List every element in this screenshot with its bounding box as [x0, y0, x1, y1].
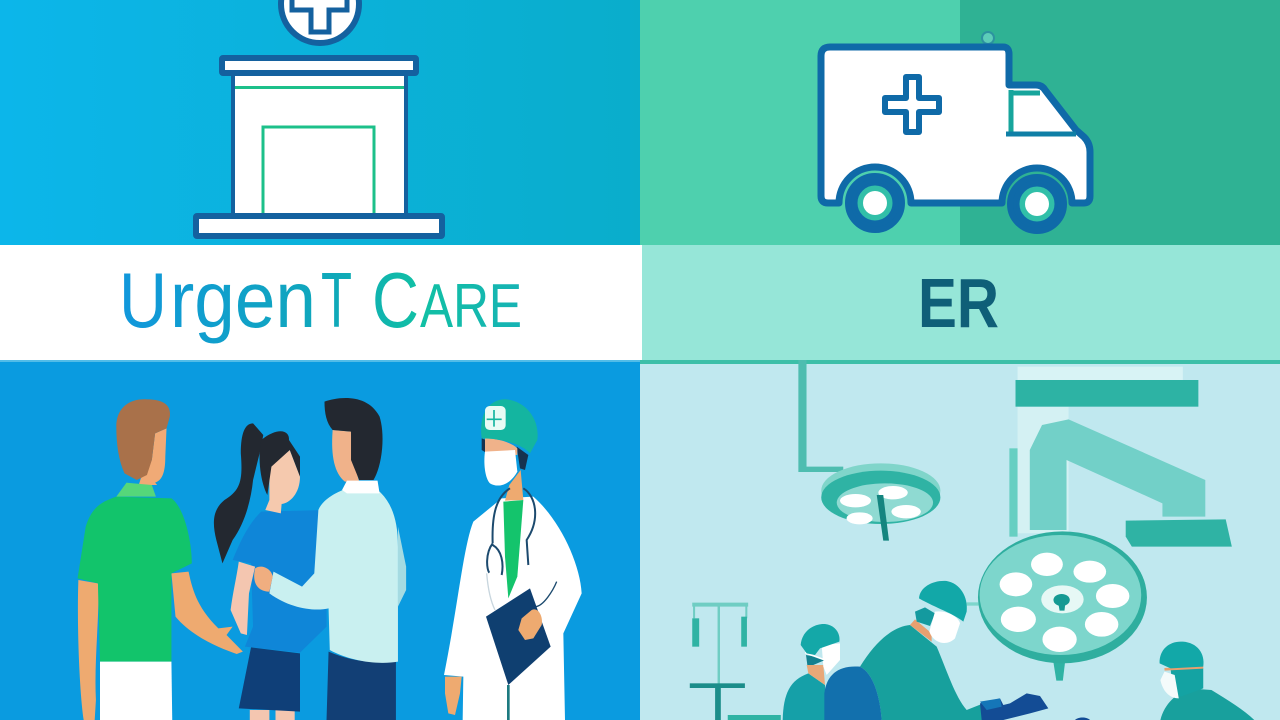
panel: patients and doctor: [0, 360, 640, 720]
illustration: small surgical lamp: [798, 360, 940, 541]
heading: Urgent Care: T: [321, 256, 352, 344]
heading: Urgent Care: ARE: [420, 272, 522, 341]
figure: surgeon on left: [783, 624, 840, 720]
figure: woman with ponytail: [214, 423, 327, 720]
icon: front wheel: [848, 176, 902, 230]
group: surgeons at the table: [783, 581, 1090, 720]
panel: ambulance: [640, 0, 1280, 245]
heading band: ER: [642, 245, 1280, 360]
icon: rear wheel: [1010, 177, 1064, 231]
illustration: ceiling arm: [1009, 367, 1232, 547]
icon: cross on ambulance: [885, 77, 939, 132]
heading: Urgent Care: C: [372, 256, 419, 344]
heading: Urgent Care: [119, 255, 522, 344]
group: operating room equipment: [690, 360, 1254, 720]
heading band: urgent care: [0, 245, 641, 360]
group: patients: [78, 398, 406, 720]
icon: cap badge: [485, 406, 506, 430]
icon: clipboard: [486, 588, 551, 685]
panel: urgent care building: [0, 0, 640, 245]
figure: man in green shirt: [78, 399, 243, 720]
figure: man in pale shirt: [254, 398, 406, 720]
illustration: IV stand: [690, 603, 781, 720]
illustration: large surgical lamp: [978, 531, 1147, 681]
figure: surgeon on right: [1160, 642, 1254, 720]
icon: urgent care clinic building: [196, 0, 442, 236]
icon: medical cross sign: [281, 0, 359, 43]
panel: operating room: [640, 360, 1280, 720]
heading: Urgent Care: U: [119, 256, 167, 344]
icon: ambulance: [821, 32, 1090, 231]
figure: doctor with clipboard: [444, 399, 582, 720]
heading: Urgent Care: rgen: [170, 255, 316, 344]
icon: stethoscope: [487, 488, 535, 575]
heading: ER: ER: [918, 264, 999, 342]
figure: lead surgeon: [824, 581, 1090, 720]
